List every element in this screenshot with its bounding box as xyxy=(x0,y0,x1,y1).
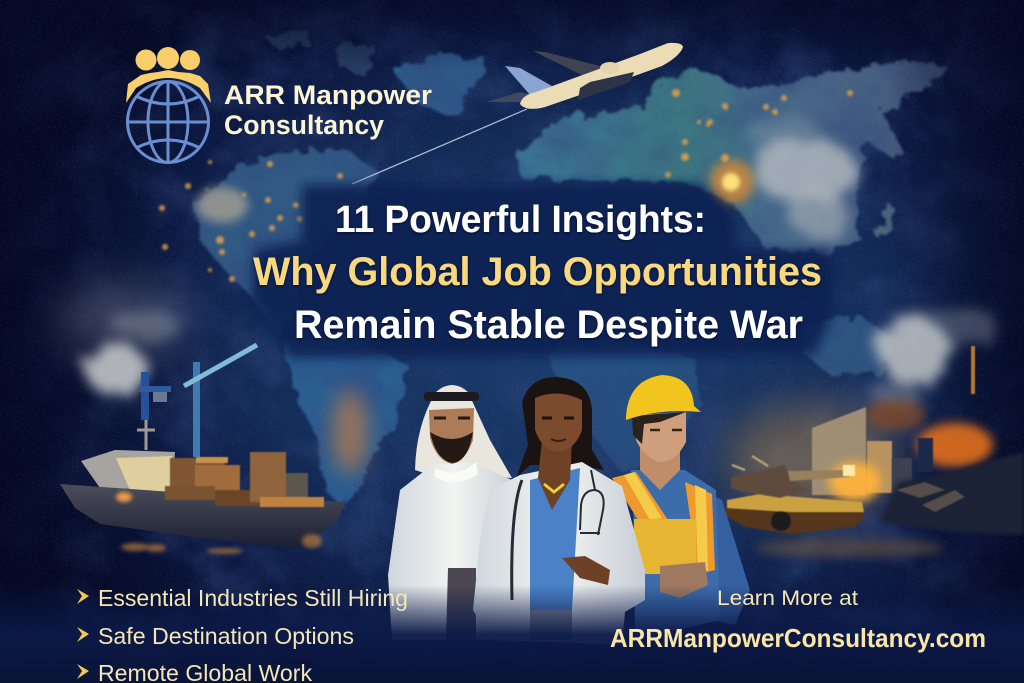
containers xyxy=(165,452,324,507)
rubble xyxy=(880,452,1024,535)
eurasia xyxy=(518,60,945,252)
hair xyxy=(516,377,604,478)
south america xyxy=(285,332,410,510)
airplane xyxy=(486,43,683,109)
far wing xyxy=(533,51,604,80)
beard xyxy=(430,432,473,463)
stethoscope xyxy=(580,470,604,535)
company name: ARR Manpower xyxy=(224,80,433,110)
company name xyxy=(224,80,433,140)
glow north america xyxy=(196,187,248,223)
shirt xyxy=(630,470,720,640)
tank muzzle xyxy=(843,465,855,476)
crane tower xyxy=(193,362,200,457)
title: Remain Stable Despite War xyxy=(294,303,803,347)
clipboard xyxy=(634,519,696,574)
north america xyxy=(196,148,378,335)
city fire xyxy=(725,346,1024,558)
tank antenna xyxy=(732,456,768,470)
tank lower hull xyxy=(725,508,864,534)
coat xyxy=(473,462,645,645)
glow core xyxy=(722,173,740,191)
vest stripe right xyxy=(695,485,708,575)
mid building xyxy=(867,441,892,493)
tall building xyxy=(812,407,866,495)
skirt xyxy=(530,610,572,640)
smoke right xyxy=(871,307,996,409)
collar xyxy=(434,462,478,483)
logo globe xyxy=(128,81,208,163)
water reflection xyxy=(121,534,322,554)
smoke left haze xyxy=(60,282,190,358)
eyes xyxy=(650,429,682,431)
fire embers xyxy=(865,399,925,431)
world map xyxy=(196,28,945,510)
tank wheel xyxy=(771,511,791,531)
person: doctor xyxy=(473,377,645,645)
ship and crane xyxy=(60,345,345,554)
contrail xyxy=(352,109,527,184)
bullet list xyxy=(77,585,408,683)
near wing xyxy=(578,72,634,100)
logo people xyxy=(126,47,211,103)
australia xyxy=(805,315,895,375)
face xyxy=(535,393,582,452)
pocket folder xyxy=(446,568,476,640)
backdrop top block xyxy=(250,183,838,358)
eyes xyxy=(542,416,574,420)
dark building xyxy=(892,458,912,494)
smile xyxy=(551,439,566,441)
superstructure xyxy=(81,450,175,490)
glow asia xyxy=(710,160,754,204)
dark tower xyxy=(918,438,933,472)
face xyxy=(429,408,474,464)
smoke left xyxy=(86,311,181,396)
tailplane xyxy=(486,92,540,102)
hand xyxy=(660,562,708,598)
crane jib xyxy=(184,345,257,386)
hand xyxy=(562,556,610,585)
smoke clouds xyxy=(60,116,996,409)
engine xyxy=(600,62,620,74)
title: Why Global Job Opportunities xyxy=(253,250,822,294)
person: worker xyxy=(612,375,750,640)
hair xyxy=(632,412,686,444)
title backdrop xyxy=(250,183,838,358)
arctic islands xyxy=(265,28,375,72)
call to action: ARRManpowerConsultancy.com xyxy=(610,623,986,653)
ground xyxy=(755,538,945,558)
vest left xyxy=(612,472,668,520)
flare beam xyxy=(971,346,975,394)
edge darkening top xyxy=(0,0,1024,70)
vest right xyxy=(685,482,715,575)
bridge bright xyxy=(116,456,172,495)
mast xyxy=(137,420,155,450)
title: 11 Powerful Insights: xyxy=(335,199,706,241)
sleeve xyxy=(690,490,750,625)
hull xyxy=(60,484,345,548)
tank upper hull xyxy=(727,494,864,512)
warm haze xyxy=(725,405,895,515)
robe xyxy=(388,462,520,640)
call to action: Learn More at xyxy=(717,587,858,610)
logo xyxy=(126,47,433,163)
eyes and brows xyxy=(434,416,470,420)
bullet 1: Essential Industries Still Hiring xyxy=(98,585,408,611)
muzzle glow xyxy=(829,462,881,502)
edge darkening left xyxy=(0,0,200,683)
tank gun xyxy=(788,470,850,481)
neck and chest xyxy=(538,440,572,510)
tank xyxy=(725,456,881,534)
funnel crane xyxy=(139,372,171,420)
rubble light xyxy=(896,482,965,512)
bottom fade xyxy=(0,585,1024,683)
fuselage xyxy=(520,43,683,109)
helmet xyxy=(626,375,701,420)
smoke asia xyxy=(742,116,857,239)
glowing lights on map xyxy=(159,89,853,474)
japan xyxy=(872,205,898,240)
company name: Consultancy xyxy=(224,110,384,140)
stethoscope left xyxy=(512,480,522,600)
agal band xyxy=(424,392,479,401)
headcloth xyxy=(415,385,512,478)
call to action xyxy=(610,587,986,653)
shirt xyxy=(530,468,580,610)
glow south america xyxy=(332,390,368,474)
person: man in thobe xyxy=(388,385,520,640)
tail fin xyxy=(505,66,552,95)
face xyxy=(636,412,686,462)
bullet 2: Safe Destination Options xyxy=(98,623,354,649)
tank parts xyxy=(725,456,864,534)
title xyxy=(253,199,822,347)
necklace xyxy=(544,484,564,492)
africa xyxy=(545,340,700,470)
city light dots xyxy=(159,89,853,282)
greenland xyxy=(392,52,488,116)
ship lights xyxy=(116,492,132,502)
tank turret xyxy=(731,465,808,498)
neck xyxy=(640,445,680,490)
fire glow xyxy=(917,423,993,467)
edge darkening right xyxy=(890,0,1024,683)
vest stripe left xyxy=(624,472,662,520)
